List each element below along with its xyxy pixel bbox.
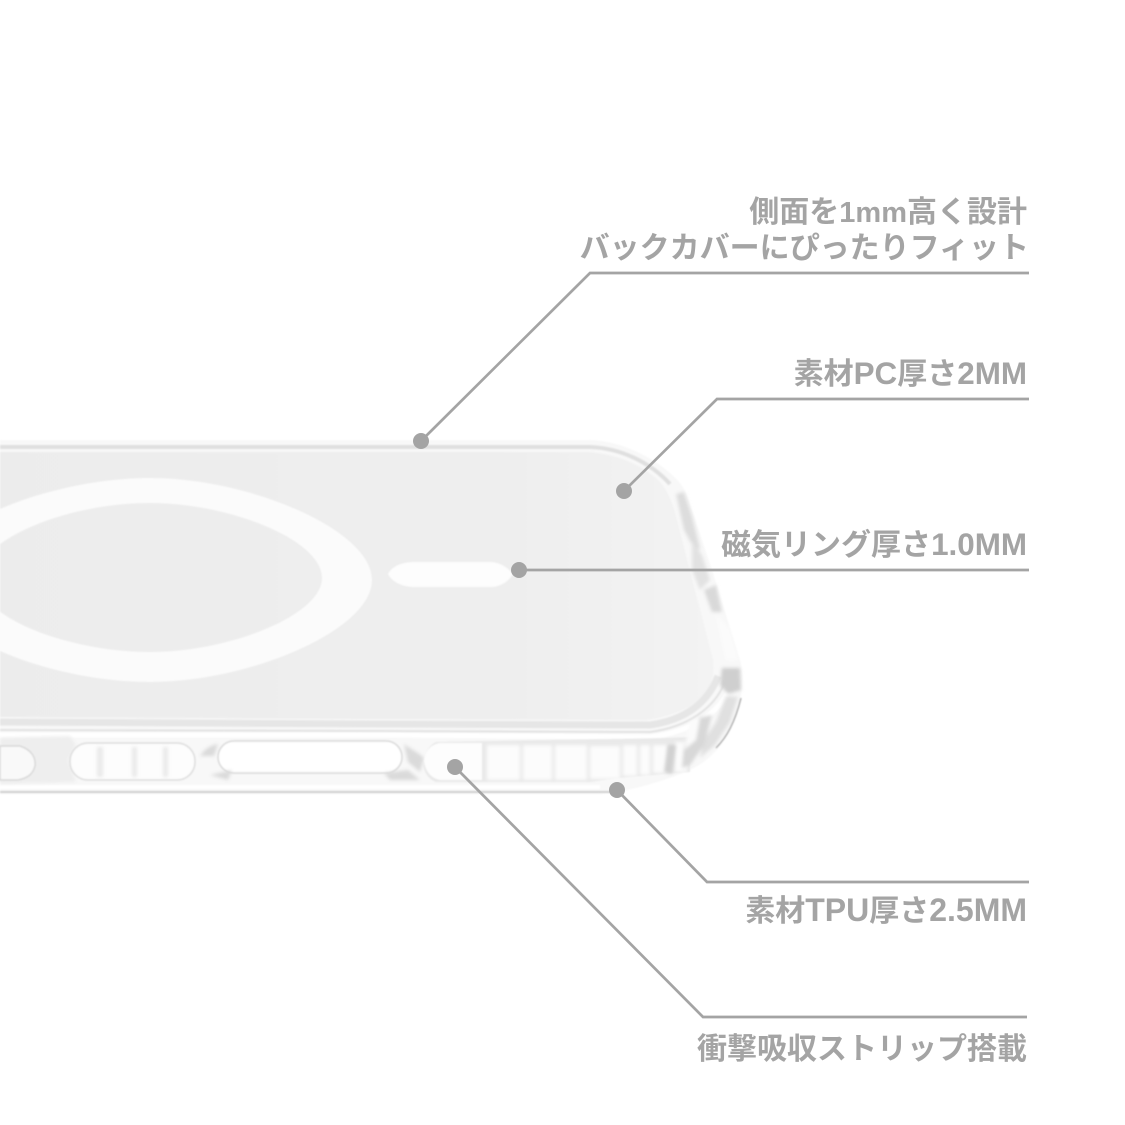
label: 素材TPU厚さ2.5MM bbox=[745, 892, 1027, 928]
shock absorbing strip bbox=[424, 737, 690, 782]
leader line bbox=[455, 767, 1027, 1017]
label: 衝撃吸収ストリップ搭載 bbox=[697, 1033, 1027, 1066]
marker dot bbox=[413, 433, 429, 449]
alignment pill slot bbox=[388, 562, 513, 587]
lower rim bands bbox=[0, 676, 730, 792]
leader line bbox=[519, 569, 1029, 571]
callout: TPU thickness bbox=[609, 782, 1029, 928]
callout: PC thickness bbox=[616, 356, 1029, 499]
phone case bbox=[0, 440, 742, 794]
callout: shock absorbing strip bbox=[447, 759, 1027, 1066]
label line 2: バックカバーにぴったりフィット bbox=[580, 232, 1029, 265]
marker dot bbox=[511, 562, 527, 578]
back panel bbox=[0, 452, 714, 720]
leader line bbox=[617, 790, 1029, 882]
callout: side height bbox=[413, 196, 1029, 449]
marker dot bbox=[447, 759, 463, 775]
case top rim bbox=[0, 447, 670, 484]
bottom button bbox=[70, 743, 195, 780]
leader line bbox=[624, 399, 1029, 491]
strip ribs bbox=[487, 742, 687, 780]
right side rim mottling bbox=[676, 492, 738, 660]
label: 素材PC厚さ2MM bbox=[794, 356, 1027, 391]
callout: magnetic ring thickness bbox=[511, 527, 1029, 578]
leader line bbox=[421, 273, 1029, 441]
marker dot bbox=[616, 483, 632, 499]
label line 1: 側面を1mm高く設計 bbox=[749, 196, 1027, 229]
marker dot bbox=[609, 782, 625, 798]
case outer body bbox=[0, 440, 742, 794]
left band shading bbox=[0, 736, 76, 784]
corner facets bbox=[664, 668, 741, 774]
magnetic ring bbox=[0, 478, 372, 682]
left port bbox=[0, 746, 35, 780]
corner dark edge bbox=[716, 698, 741, 748]
bottom slot bbox=[218, 741, 402, 773]
label: 磁気リング厚さ1.0MM bbox=[721, 527, 1027, 562]
connector shadows bbox=[200, 744, 424, 780]
